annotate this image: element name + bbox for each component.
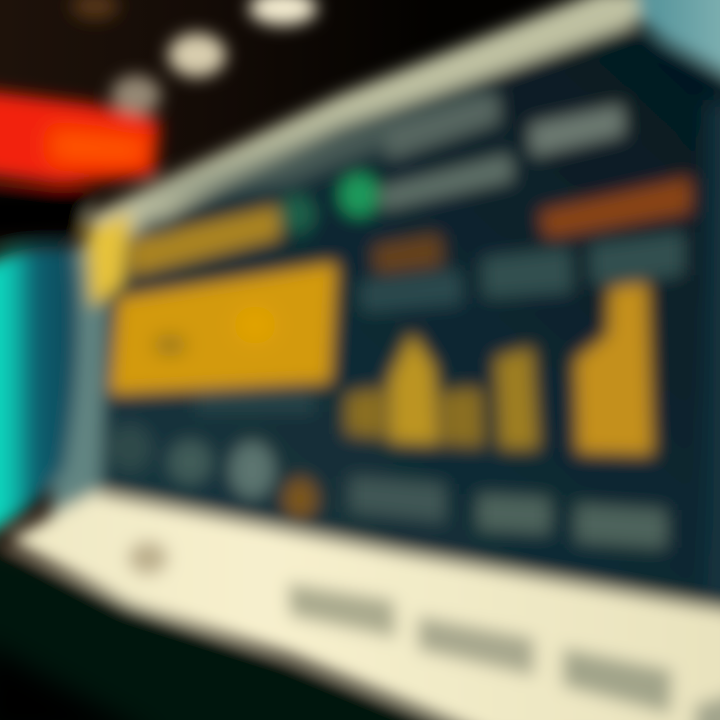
column labels — [360, 232, 684, 312]
red neon sign — [0, 90, 160, 184]
button 2 — [418, 616, 534, 676]
bar tall — [390, 334, 438, 444]
light: white dot top — [249, 0, 317, 25]
bar narrow — [496, 348, 538, 448]
green indicators — [279, 174, 378, 233]
teal corner — [635, 0, 720, 82]
lower left icons — [108, 392, 315, 498]
bar large — [576, 283, 652, 454]
text line upper — [385, 92, 500, 160]
block 3 — [576, 504, 666, 548]
bar mid — [440, 388, 484, 446]
cream base band — [8, 492, 720, 720]
header text lines — [380, 92, 624, 210]
icon: dark green dot — [279, 195, 315, 233]
label 2 — [482, 248, 572, 298]
yellow panel — [110, 263, 336, 394]
background lights — [71, 0, 317, 115]
red sign hot centre — [50, 128, 148, 165]
stat 3 — [230, 442, 274, 498]
lower text blocks — [350, 476, 666, 548]
top edge light strip — [85, 0, 690, 250]
heading: orange right — [540, 178, 690, 238]
yellow tab at left — [86, 212, 130, 308]
bottom-left vignette — [0, 640, 160, 720]
text line right — [530, 105, 624, 156]
corner button — [695, 692, 720, 720]
stat 1 — [108, 424, 152, 472]
heading dark spot — [142, 219, 174, 233]
block 1 — [350, 476, 445, 522]
left bezel — [50, 235, 108, 520]
button 3 — [563, 648, 672, 714]
yellow panel texture — [154, 305, 277, 355]
stripe shadow band below top edge — [130, 85, 490, 205]
orange icon — [283, 478, 317, 520]
icon: bright green dot — [340, 174, 378, 216]
label 3 — [590, 232, 684, 285]
heading: orange small — [373, 234, 442, 274]
stat caption — [195, 392, 315, 412]
icon on band — [128, 541, 168, 575]
panel right edge sheen — [708, 100, 720, 610]
dark area behind monitor left — [0, 190, 90, 240]
heading: yellow — [130, 206, 280, 276]
cream band labels — [128, 541, 720, 720]
text line lower — [380, 154, 513, 210]
label 1 — [360, 270, 462, 312]
light: brown dot — [71, 0, 119, 20]
block 2 — [478, 494, 550, 534]
main dark panel — [100, 26, 720, 610]
light: small dot — [111, 75, 161, 115]
teal ring — [0, 246, 78, 538]
stat 2 — [168, 440, 212, 484]
button 1 — [288, 583, 396, 638]
dark lower-left floor — [0, 545, 500, 720]
light: middle dot — [168, 33, 226, 77]
bar chart — [346, 283, 652, 454]
bar small left — [346, 388, 386, 438]
